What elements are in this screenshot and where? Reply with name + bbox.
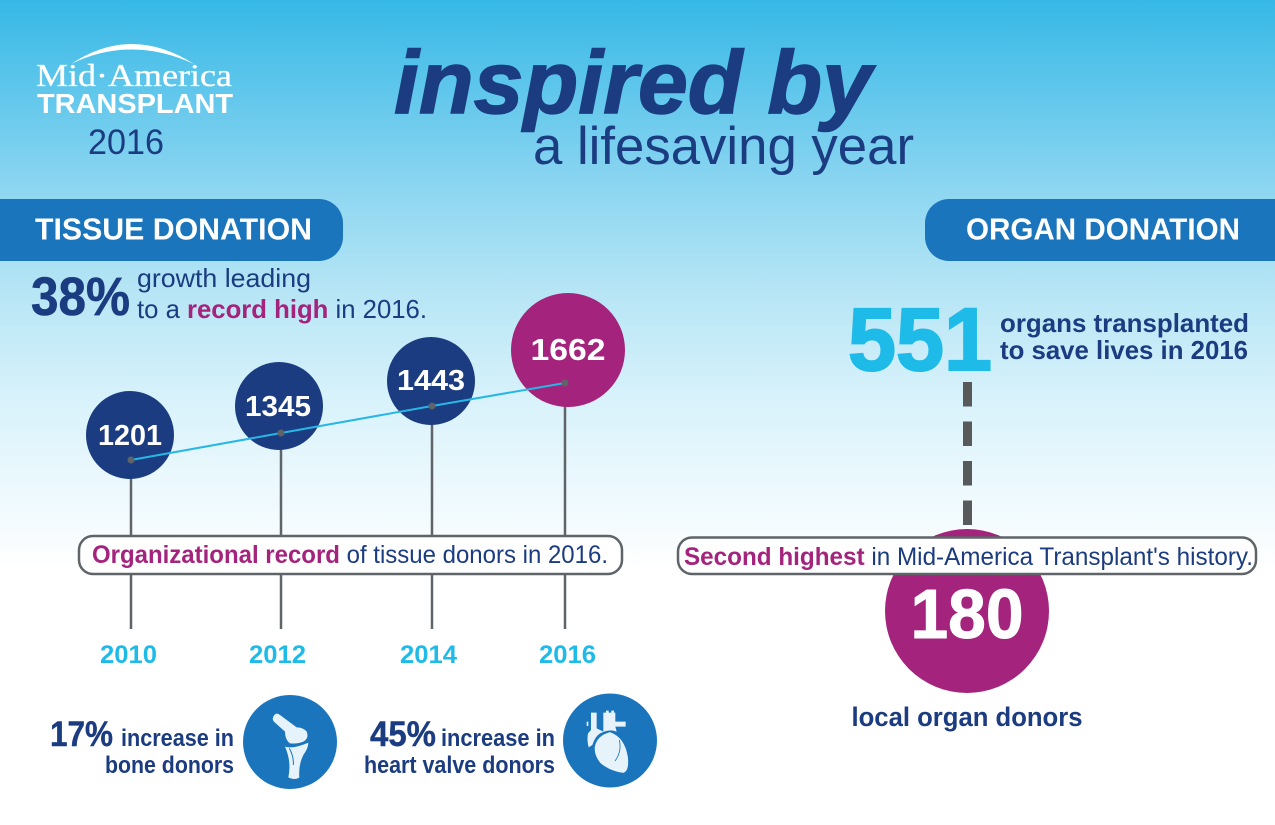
year labels: 2014 — [400, 641, 457, 669]
heading: organ donation: ORGAN DONATION — [966, 212, 1240, 246]
logo: 2016 — [88, 123, 164, 162]
logo: Mid·America — [36, 57, 232, 93]
tissue growth statement — [31, 263, 427, 327]
trend line — [128, 380, 568, 464]
data point: 2012 — [235, 362, 323, 450]
stat: 551 organs transplanted — [848, 289, 1249, 389]
data point: 2016: 1662 — [530, 332, 606, 367]
year labels: 2010 — [100, 641, 157, 669]
data point: 2012: 1345 — [245, 391, 311, 423]
stat: bone donors: 17% — [50, 715, 113, 754]
data point: 2014 — [387, 337, 475, 425]
stat: heart valve donors: heart valve donors — [364, 752, 555, 779]
stat: 180 local organ donors — [852, 529, 1082, 732]
stat: 180 local organ donors: 180 — [910, 575, 1024, 653]
dashed connector — [963, 382, 972, 526]
logo: TRANSPLANT — [37, 88, 233, 119]
stat: heart valve donors: increase in — [441, 725, 555, 752]
stat: bone donors — [50, 715, 234, 779]
icon: knee bone — [243, 695, 337, 789]
icon: heart — [563, 694, 657, 788]
heading: tissue donation: TISSUE DONATION — [35, 212, 312, 246]
stat: 551 organs transplanted: to save lives in 2016 — [1000, 335, 1248, 365]
data point: 2010 — [86, 391, 174, 479]
tissue growth statement: to a record high in 2016. — [137, 294, 427, 324]
tissue growth statement: 38% — [31, 267, 130, 327]
stat: heart valve donors: 45% — [370, 715, 436, 754]
stat: 551 organs transplanted: 551 — [848, 289, 992, 389]
tissue growth statement: growth leading — [137, 263, 311, 293]
logo — [36, 44, 233, 162]
data point: 2016 — [511, 293, 625, 407]
heading: organ donation — [925, 199, 1275, 261]
callout: organizational record: Organizational record of tissue donors in 2016. — [92, 541, 608, 569]
stat: heart valve donors — [364, 715, 555, 779]
callout: second highest: Second highest in Mid-America Transplant's history. — [684, 543, 1253, 571]
year labels — [100, 641, 596, 669]
stat: 551 organs transplanted: organs transplanted — [1000, 308, 1249, 338]
stat: bone donors: bone donors — [105, 752, 234, 779]
year labels: 2016 — [539, 641, 596, 669]
data point: 2014: 1443 — [397, 365, 465, 397]
year labels: 2012 — [249, 641, 306, 669]
stat: 180 local organ donors: local organ donors — [852, 702, 1082, 732]
stat: bone donors: increase in — [121, 725, 234, 752]
title: inspired by — [394, 32, 877, 132]
data point: 2010: 1201 — [98, 420, 162, 452]
title — [394, 32, 914, 176]
background — [0, 0, 1275, 570]
title: a lifesaving year — [533, 117, 914, 176]
heading: tissue donation — [0, 199, 343, 261]
line chart: tissue donors by year — [86, 293, 625, 629]
